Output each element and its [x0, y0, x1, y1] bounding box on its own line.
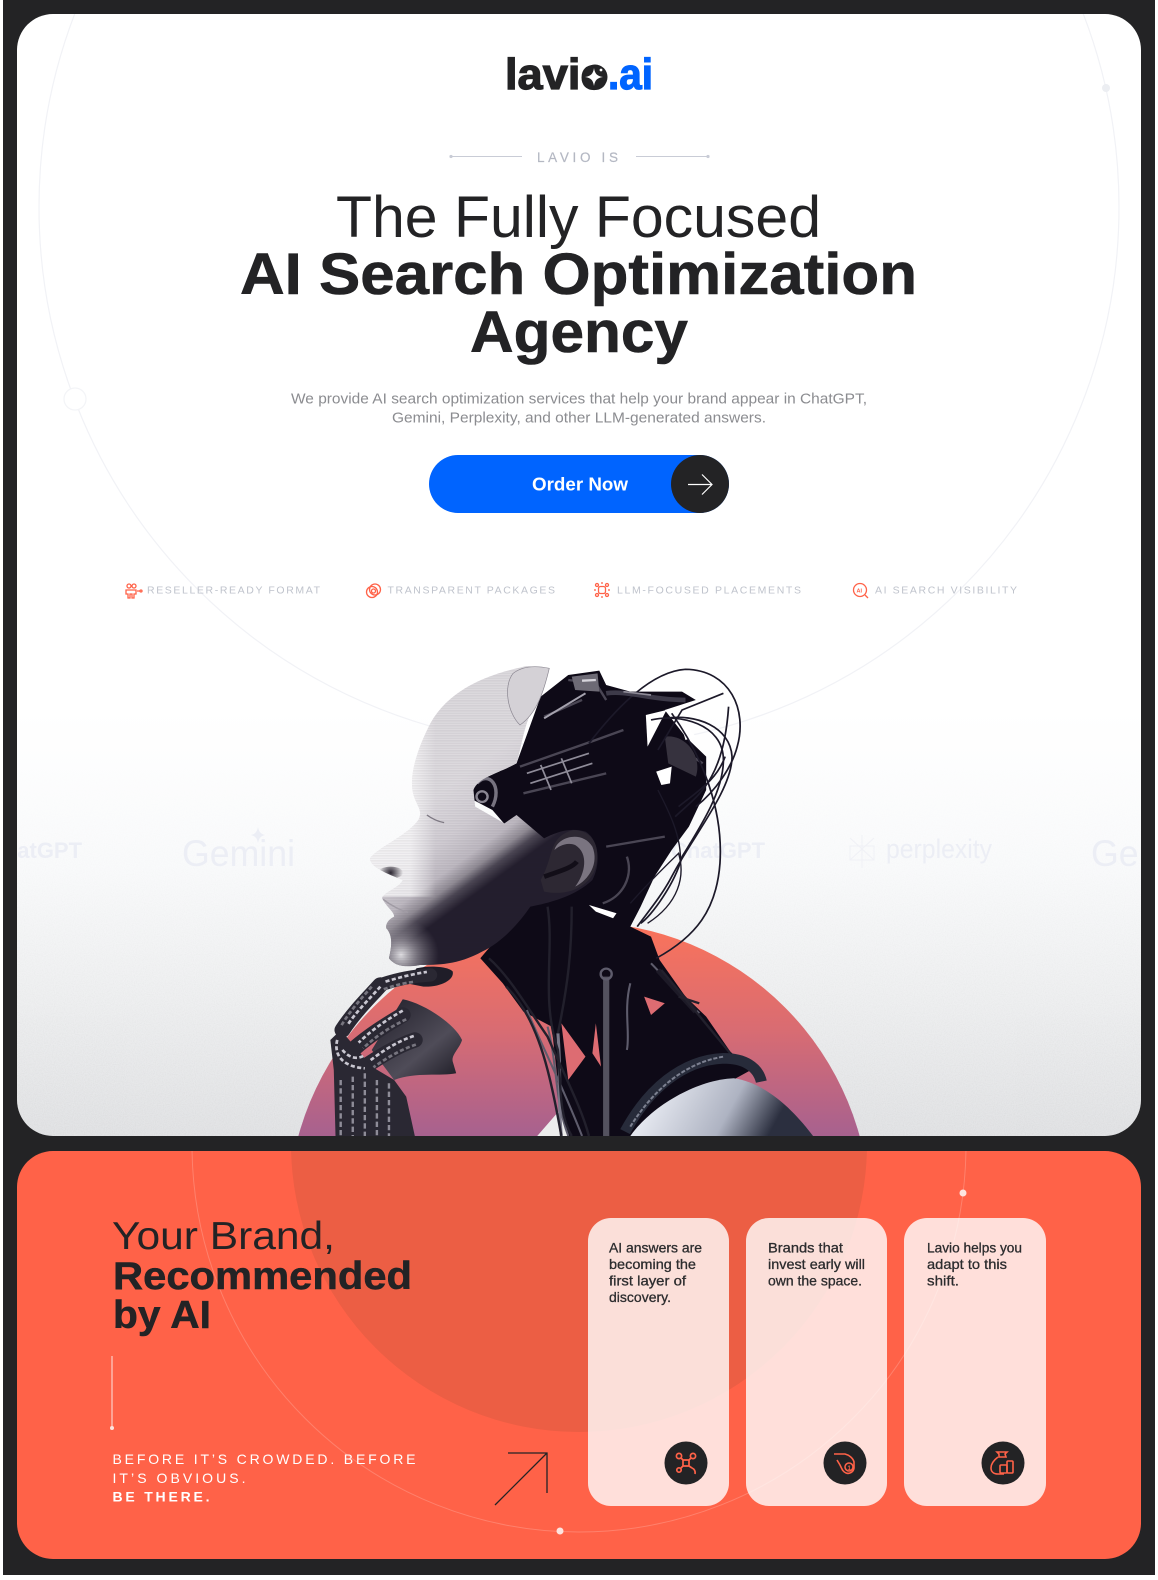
palm: [330, 1030, 415, 1136]
icon: money bag: [982, 1442, 1024, 1484]
heading: by AI: [113, 1294, 211, 1337]
button: order now: [429, 455, 729, 513]
card: brands invest early: [746, 1218, 887, 1506]
fingers: [342, 975, 430, 1067]
skull panel: [508, 667, 549, 725]
robot hand: [330, 967, 462, 1136]
face: [370, 666, 598, 966]
dark circle backdrop: [291, 1151, 867, 1432]
card: Lavio helps: [904, 1218, 1046, 1506]
card: AI answers: becoming the: [609, 1256, 696, 1272]
eyebrow: Lavio is: LAVIO IS: [537, 150, 618, 165]
large orbit circle: [39, 0, 1119, 747]
panel: your brand recommended by AI: [17, 1151, 1141, 1559]
faint LLM brand logos: ChatGPT: [671, 838, 766, 863]
subtitle: Gemini, Perplexity, and other LLM-generated answers.: [392, 410, 766, 426]
tag: llm-focused placements: LLM-FOCUSED PLACEMENTS: [617, 584, 801, 596]
robot head illustration: [330, 663, 813, 1136]
tagline: IT’S OBVIOUS.: [112, 1470, 246, 1486]
shoulder: [630, 1078, 813, 1136]
chest fragment behind cables: [537, 1112, 568, 1136]
card: Lavio helps: Lavio helps you: [927, 1240, 1022, 1256]
faint LLM brand logos: [18, 828, 1137, 868]
thin orbit: [192, 1151, 966, 1532]
tagline: BEFORE IT’S CROWDED. BEFORE: [112, 1451, 416, 1467]
metal highlights: [336, 972, 427, 1136]
title: Agency: [470, 300, 688, 365]
card: Lavio helps: shift.: [927, 1272, 959, 1288]
title: The Fully Focused: [336, 185, 821, 250]
card: brands invest early: own the space.: [768, 1272, 862, 1288]
ear: [541, 830, 597, 893]
card: AI answers: first layer of: [609, 1272, 686, 1288]
orbit dot left: [556, 1528, 564, 1534]
tag: transparent packages: TRANSPARENT PACKAGES: [388, 584, 555, 596]
button: order now: Order Now: [532, 474, 629, 494]
tagline: BE THERE.: [112, 1488, 210, 1504]
eyebrow: Lavio is: [450, 152, 710, 162]
card: brands invest early: invest early will: [768, 1256, 865, 1272]
icon: hand with number one: 1: [848, 1466, 852, 1472]
subtitle: We provide AI search optimization services that help your brand appear in ChatGPT,: [291, 390, 867, 408]
tag: ai search visibility: AI: [856, 588, 862, 594]
icon: hand with number one: [824, 1442, 866, 1484]
coral semicircle behind robot: [298, 926, 860, 1136]
faint LLM brand logos: perplexity: [886, 834, 992, 864]
logo: [508, 56, 651, 90]
panel: hero: [17, 14, 1141, 1136]
chin fingertip: [406, 967, 453, 987]
card: AI answers: [588, 1218, 729, 1506]
machinery details: [477, 673, 703, 1136]
icon: network nodes: [664, 1442, 708, 1484]
wires: [589, 669, 740, 958]
tag: reseller-ready format: RESELLER-READY FORMAT: [147, 584, 321, 596]
card: AI answers: AI answers are: [609, 1240, 702, 1256]
orbit dot right: [960, 1190, 966, 1196]
heading: Your Brand,: [112, 1215, 335, 1258]
tagline: [112, 1451, 416, 1504]
tag: ai search visibility: AI SEARCH VISIBILITY: [875, 584, 1017, 596]
icon: arrow: [688, 474, 712, 494]
title: [240, 185, 917, 365]
icon: diagonal arrow: [495, 1453, 547, 1505]
heading: [112, 1215, 412, 1337]
heading: Recommended: [113, 1255, 412, 1298]
faint LLM brand logos: Gemini: [182, 833, 295, 874]
machinery gaps: [589, 710, 696, 918]
feature tags: [126, 583, 1017, 598]
logo: .ai: [608, 50, 653, 99]
coral gaps in neck: [561, 997, 665, 1080]
neck cables: [489, 907, 730, 1136]
machinery: [473, 671, 751, 1136]
vertical marker line: [110, 1356, 114, 1430]
card: brands invest early: Brands that: [768, 1240, 843, 1256]
subtitle: [291, 390, 867, 426]
logo: lavio: [505, 50, 608, 99]
title: AI Search Optimization: [240, 242, 917, 307]
facial features: [383, 815, 444, 913]
card: Lavio helps: adapt to this: [927, 1256, 1007, 1272]
thumb: [372, 999, 462, 1080]
card: AI answers: discovery.: [609, 1289, 671, 1305]
